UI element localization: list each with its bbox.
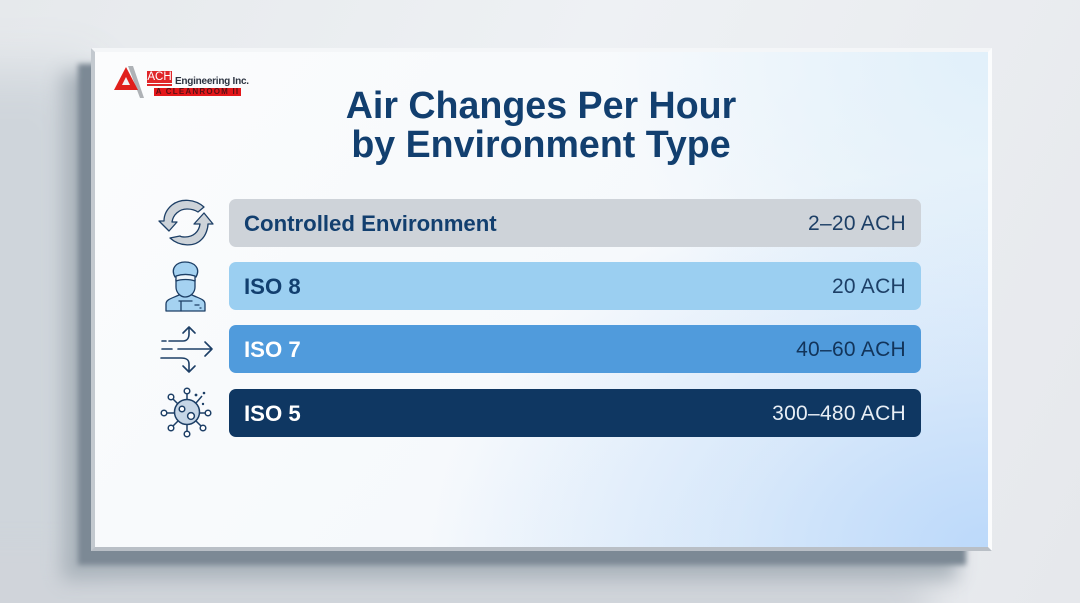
label: ISO 8 — [244, 274, 301, 299]
value: 2–20 ACH — [808, 212, 906, 235]
floor wash — [100, 300, 990, 301]
icon: cleanroom worker — [165, 261, 206, 312]
background wash — [500, 150, 510, 550]
bar: ISO 7 — [229, 325, 921, 373]
panel — [91, 48, 992, 551]
logo — [114, 66, 249, 98]
value: 20 ACH — [832, 275, 906, 298]
icon: logo triangle — [114, 66, 144, 98]
icon: recycle arrows — [158, 200, 214, 246]
logo engineering text: Engineering Inc. — [175, 76, 249, 87]
soft shadow — [162, 172, 857, 480]
value: 300–480 ACH — [772, 402, 906, 425]
label: Controlled Environment — [244, 211, 497, 236]
label: ISO 7 — [244, 337, 301, 362]
title: Air Changes Per Hour — [346, 84, 736, 126]
label: ISO 5 — [244, 401, 301, 426]
title: by Environment Type — [351, 123, 731, 165]
logo name: ACH — [147, 71, 172, 83]
icon: airflow arrows — [160, 326, 213, 373]
logo underline — [147, 84, 172, 86]
title — [346, 84, 736, 165]
value: 40–60 ACH — [796, 338, 906, 361]
bar: Controlled Environment — [229, 199, 921, 247]
bar: ISO 8 — [229, 262, 921, 310]
panel shadow — [178, 164, 866, 465]
bar: ISO 5 — [229, 389, 921, 437]
icon: particle virus — [160, 388, 212, 438]
